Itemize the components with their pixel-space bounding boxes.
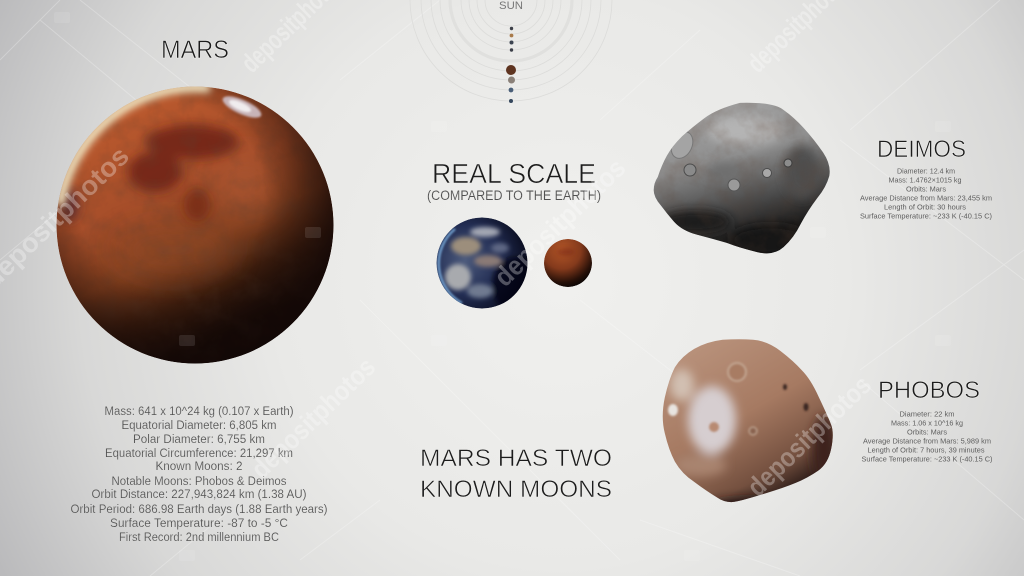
title: Phobos: PHOBOS [878, 377, 980, 404]
Deimos craters [667, 128, 792, 191]
Deimos facts text: Orbits: Mars [906, 184, 946, 194]
polar ice cap [221, 94, 263, 120]
Mars facts text [70, 406, 328, 544]
Mars facts text: Mass: 641 x 10^24 kg (0.107 x Earth) [104, 406, 294, 418]
Mars facts text: Orbit Period: 686.98 Earth days (1.88 Earth years) [70, 504, 328, 516]
Phobos facts text: Length of Orbit: 7 hours, 39 minutes [868, 446, 985, 454]
callout: Mars has two known moons: KNOWN MOONS [420, 476, 612, 503]
bright dust region [162, 168, 276, 282]
title: Deimos: DEIMOS [877, 136, 966, 163]
callout: Mars has two known moons [420, 445, 612, 503]
Mars facts text: First Record: 2nd millennium BC [119, 532, 279, 544]
Mars facts text: Polar Diameter: 6,755 km [133, 434, 265, 446]
heading: real scale: REAL SCALE [432, 158, 596, 189]
solar system planets [506, 27, 516, 103]
Deimos facts text: Mass: 1.4762×1015 kg [888, 176, 962, 184]
Deimos facts text [860, 166, 992, 220]
polar rim glow [60, 87, 210, 205]
Mars facts text: Known Moons: 2 [156, 461, 242, 473]
Phobos facts text: Surface Temperature: ~233 K (-40.15 C) [862, 454, 993, 464]
dark albedo region [61, 125, 238, 221]
moon: Deimos [654, 102, 830, 254]
watermarks: depositphotos [245, 352, 381, 484]
label: sun: SUN [499, 0, 523, 12]
Deimos texture [656, 102, 800, 242]
Phobos craters [668, 363, 808, 435]
Phobos facts text [862, 410, 993, 464]
earth land and clouds [442, 224, 528, 306]
watermarks: depositphotos [488, 153, 631, 292]
Mars facts text: Equatorial Circumference: 21,297 km [105, 448, 293, 460]
Deimos shading [659, 115, 820, 255]
limb shadow [56, 86, 334, 364]
Deimos facts text: Length of Orbit: 30 hours [884, 202, 966, 212]
Phobos bright patch [670, 369, 836, 522]
Deimos facts text: Diameter: 12.4 km [897, 166, 955, 176]
surface mottling [64, 92, 296, 363]
Phobos facts text: Diameter: 22 km [900, 410, 954, 418]
title: Mars: MARS [161, 36, 229, 64]
Mars facts text: Orbit Distance: 227,943,824 km (1.38 AU) [92, 489, 307, 501]
callout: Mars has two known moons: MARS HAS TWO [420, 445, 612, 472]
moon: Phobos [662, 339, 833, 502]
planet: Earth [436, 218, 528, 308]
Mars facts text: Surface Temperature: -87 to -5 °C [110, 518, 288, 530]
solar system diagram [410, 0, 612, 103]
planet: small Mars [544, 239, 592, 287]
subheading: compared to the earth: (COMPARED TO THE EARTH) [427, 188, 601, 203]
Mars facts text: Equatorial Diameter: 6,805 km [122, 420, 276, 432]
planet: Mars [55, 85, 335, 365]
Phobos facts text: Mass: 1.06 x 10^16 kg [891, 418, 963, 428]
earth atmosphere rim [439, 229, 462, 303]
watermarks: depositphotos [741, 370, 877, 502]
orbit rings [410, 0, 612, 101]
Deimos facts text: Average Distance from Mars: 23,455 km [860, 194, 992, 202]
Deimos facts text: Surface Temperature: ~233 K (-40.15 C) [860, 212, 992, 220]
Mars facts text: Notable Moons: Phobos & Deimos [112, 476, 287, 488]
Phobos facts text: Average Distance from Mars: 5,989 km [863, 436, 991, 446]
Phobos facts text: Orbits: Mars [907, 428, 947, 436]
watermarks [0, 0, 877, 502]
